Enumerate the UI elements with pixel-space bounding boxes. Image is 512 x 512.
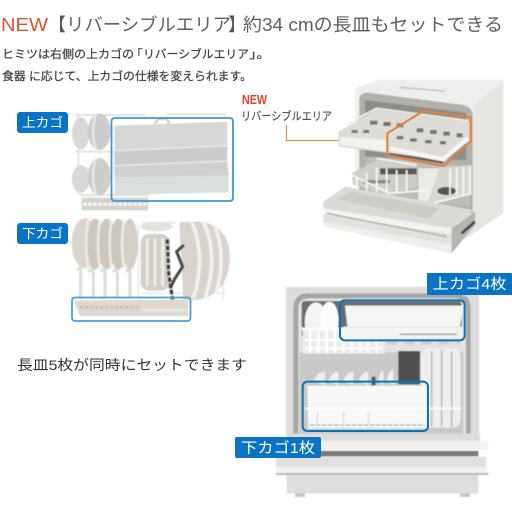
front dark wash arm xyxy=(398,351,420,384)
highlight: upper rack long plates xyxy=(112,118,233,201)
intro text: リバーシブルエリア xyxy=(143,47,249,61)
upper rack wires xyxy=(75,114,227,195)
intro text: 」。 xyxy=(249,49,271,61)
caption: 長皿5枚が同時にセットできます xyxy=(17,357,247,373)
title: 約34 cmの長皿もセットできる xyxy=(243,15,503,35)
lower rack xyxy=(352,158,417,195)
callout: new reversible area: NEW xyxy=(242,92,268,107)
upper rack front tray xyxy=(82,198,148,210)
label: 4 plates in upper rack xyxy=(427,273,512,295)
front door xyxy=(287,433,480,441)
callout: new reversible area: リバーシブルエリア xyxy=(241,109,332,123)
front upper long plates xyxy=(345,306,463,327)
title: 】 xyxy=(228,15,246,35)
front lower plates xyxy=(313,370,393,385)
upper rack photo xyxy=(72,113,229,210)
front interior xyxy=(293,293,471,437)
label: lower rack xyxy=(17,223,68,244)
lower rack right plates xyxy=(179,221,230,300)
highlight: lower long plate xyxy=(303,382,428,431)
intro text: ヒミツは右側の上カゴの xyxy=(2,47,134,61)
upper rack long plates xyxy=(114,122,227,151)
upper rack plates xyxy=(72,113,111,195)
label: 1 plate in lower rack: 下カゴ1枚 xyxy=(241,439,316,457)
title xyxy=(1,14,503,35)
label: 1 plate in lower rack xyxy=(235,437,321,458)
intro text xyxy=(2,47,271,83)
callout: new reversible area xyxy=(241,92,390,140)
label: upper rack xyxy=(17,112,68,133)
title: NEW xyxy=(1,15,48,35)
dishwasher: front view xyxy=(276,287,488,497)
title: リバーシブルエリア xyxy=(66,14,231,35)
lower rack photo xyxy=(72,218,230,316)
lower rack wires xyxy=(77,265,133,298)
highlight: reversible area xyxy=(387,111,471,166)
highlight: lower rack long plate xyxy=(72,298,190,321)
label: lower rack: 下カゴ xyxy=(22,226,63,241)
dishwasher opening xyxy=(359,93,473,213)
label: 4 plates in upper rack: 上カゴ4枚 xyxy=(432,275,507,293)
dishwasher: open with racks xyxy=(323,80,503,253)
dishwasher body xyxy=(355,80,503,240)
label: upper rack: 上カゴ xyxy=(22,115,63,130)
front top rack xyxy=(303,328,384,354)
highlight: upper long plates xyxy=(340,300,465,340)
intro text: 食器 に応じて、上カゴの仕様を変えられます。 xyxy=(2,69,252,83)
upper rack xyxy=(338,109,470,160)
lower rack long plate xyxy=(74,299,188,316)
lower rack cutlery xyxy=(167,239,173,300)
front lower long plate xyxy=(307,386,426,428)
door xyxy=(323,187,473,228)
lower rack left plates xyxy=(72,218,138,269)
intro text: 「 xyxy=(131,48,143,61)
lower rack bowls xyxy=(141,222,173,231)
front body xyxy=(286,287,479,442)
front top rack plates xyxy=(305,302,327,341)
front right plates xyxy=(421,348,461,428)
title: 【 xyxy=(48,15,66,35)
